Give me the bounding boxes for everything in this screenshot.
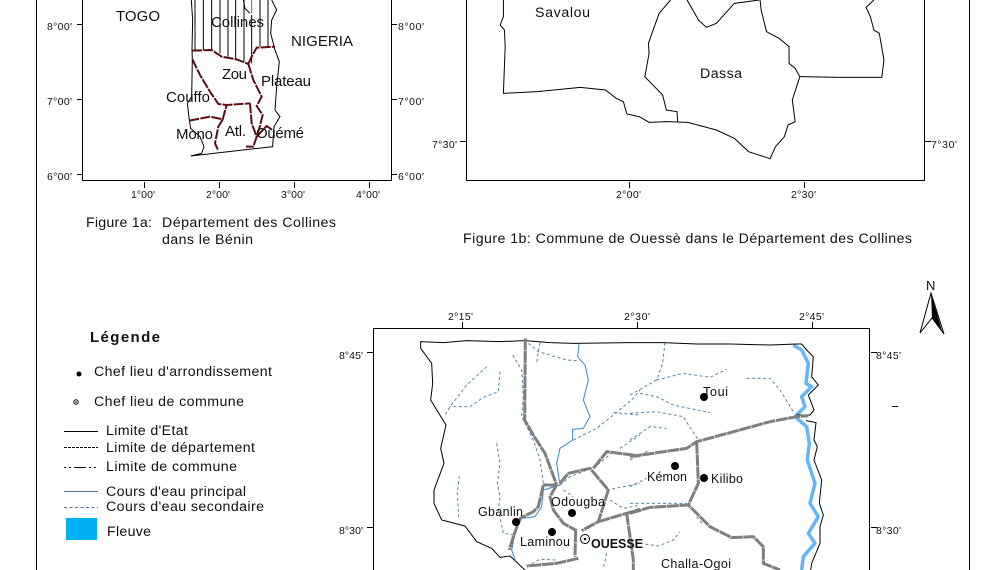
caption: figure 1a: dans le Bénin [162,232,253,248]
arrondissement limits west [509,338,640,570]
main map frame [374,328,870,570]
map 1a graticule ticks [77,24,397,188]
map 1a coordinates: 6°00' [398,171,424,183]
icon: north arrow [920,278,944,334]
place names [478,385,743,570]
legend title: Légende [90,329,160,346]
place names: Toui [703,385,728,399]
map 1a coordinates: 2°00' [206,189,230,201]
legend: limite de département: Limite de département [106,440,255,456]
legend: fleuve [66,518,151,540]
map 1a labels: Ouémé [256,125,304,142]
place names: Odougba [551,495,605,509]
icon: north arrow: N [926,278,935,293]
map 1a coordinates: 4°00' [356,189,380,201]
map 1b coordinates [432,139,957,201]
map 1a labels: TOGO [116,8,160,25]
place names: Kilibo [711,472,743,486]
streams east part [630,343,793,546]
map 1b labels: Savalou [535,5,590,21]
map frame 1b [466,0,924,180]
map 1b ticks [460,142,931,188]
map 1a coordinates: 8°00' [47,21,72,33]
legend: limite d'Etat [64,423,188,439]
caption: figure 1a: Département des Collines [162,215,336,231]
streams west part [445,343,640,568]
map 1b coordinates: 2°30' [791,189,816,201]
map 1a labels [116,8,353,143]
place names: Laminou [520,535,570,549]
map 1a coordinates: 3°00' [281,189,305,201]
communes outlines [500,0,884,159]
commune outline west [421,341,630,570]
arrondissement markers [512,393,708,536]
map coordinates: 8°45' [876,350,901,362]
legend: cours d'eau secondaire: Cours d'eau secondaire [106,499,264,515]
map 1b labels [535,5,742,82]
legend: chef lieu d'arrondissement: Chef lieu d'arrondissement [94,364,272,380]
map coordinates: 8°30' [876,525,901,537]
map 1a labels: Atl. [225,123,246,140]
map frame 1a [82,0,392,180]
map coordinates: 8°45' [339,350,363,362]
caption: figure 1a: Figure 1a: [86,215,152,231]
map 1a labels: Zou [222,66,247,83]
commune seat marker [580,534,590,544]
panel: figure 1a Benin map [47,0,424,201]
map coordinates [339,311,901,537]
map 1b coordinates: 2°00' [616,189,641,201]
caption: figure 1a [86,215,336,248]
legend: fleuve: Fleuve [107,524,151,540]
map 1b coordinates: 7°30' [931,139,957,151]
map coordinates: 8°30' [339,525,363,537]
panel: figure 1b Collines map [432,0,957,201]
main map ticks [367,322,898,528]
caption: figure 1b: Figure 1b: Commune de Ouessè dans le Département des Collines [463,231,912,247]
place names: Gbanlin [478,505,523,519]
arrondissement limits east [630,416,808,570]
map 1a coordinates: 6°00' [47,171,72,183]
legend: limite de commune: Limite de commune [106,459,237,475]
map 1a labels: NIGERIA [291,33,353,50]
legend: cours d'eau principal: Cours d'eau principal [106,484,246,500]
map 1a coordinates [47,21,424,201]
fleuve river [793,345,818,570]
map 1b coordinates: 7°30' [432,139,457,151]
map 1a labels: Mono [176,126,213,143]
legend: limite d'Etat: Limite d'Etat [106,423,188,439]
panel: main map of Ouessè [339,311,901,570]
place names: OUESSE [591,537,643,551]
legend [64,329,272,540]
legend: chef lieu de commune: Chef lieu de commune [94,394,244,410]
map 1a labels: Couffo [166,89,210,106]
map 1b labels: Dassa [700,66,742,82]
map coordinates: 2°45' [799,311,824,323]
map 1a labels: Plateau [261,73,311,90]
place names: Kémon [647,470,687,484]
map 1a coordinates: 1°00' [131,189,155,201]
map coordinates: 2°30' [624,311,650,323]
map 1a coordinates: 7°00' [398,96,424,108]
commune outline east [630,343,823,570]
map 1a labels: Collines [211,14,264,31]
Benin outline and departments [187,0,280,156]
map coordinates: 2°15' [448,311,473,323]
map 1a coordinates: 7°00' [47,96,72,108]
map 1a coordinates: 8°00' [398,21,424,33]
